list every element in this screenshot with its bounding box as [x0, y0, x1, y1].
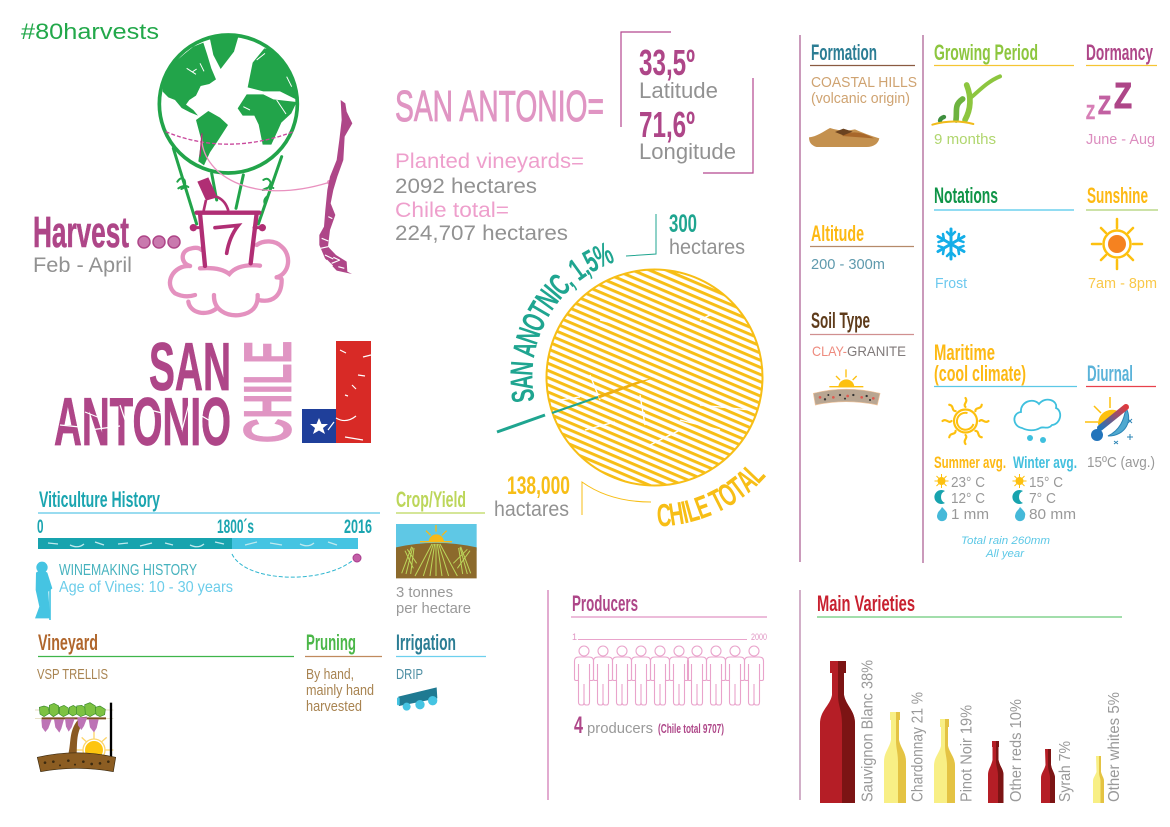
curved label: Chile total: E [690, 488, 715, 526]
heading: growing period: Growing Period [934, 40, 1038, 65]
winemaking history text: WINEMAKING HISTORY [59, 562, 197, 579]
138,000 hectares callout [494, 472, 651, 521]
soil value: GRANITE [847, 343, 906, 359]
bottle: Other whites [1093, 756, 1104, 803]
harvest heading [33, 208, 132, 277]
column dividers [548, 35, 923, 800]
panel: crop yield [396, 487, 485, 617]
curved label: San Anotnic: A [503, 375, 540, 390]
hashtag title: #80harvests [21, 19, 159, 44]
formation type: (volcanic origin) [811, 91, 910, 107]
timeline labels: 1800´s [217, 517, 254, 538]
planted vineyards figures [395, 150, 584, 245]
panel: notations [934, 183, 1074, 292]
icon: small sun [934, 474, 948, 488]
crop yield value: 3 tonnes [396, 584, 453, 601]
300 hectares callout [626, 210, 745, 259]
San Antonio wordmark [54, 329, 231, 460]
producers count: 4 [574, 712, 583, 739]
panel: irrigation [396, 630, 486, 711]
coordinates bracket [621, 32, 753, 173]
summer averages [934, 453, 1006, 523]
panel: maritime climate [934, 340, 1077, 560]
total rain note [961, 535, 1050, 560]
harvest heading: Harvest [33, 208, 129, 257]
timeline bar [38, 538, 358, 549]
pictogram scale: 1 [572, 632, 577, 642]
label: Chardonnay: Chardonnay 21 % [910, 692, 926, 802]
trellis type: VSP TRELLIS [37, 666, 108, 683]
Chilean flag [302, 341, 371, 443]
bottle: Syrah [1041, 749, 1055, 803]
138,000 hectares callout: 138,000 [507, 472, 570, 500]
Chile vertical label: CHILE [230, 341, 306, 443]
timeline labels: 0 [37, 517, 44, 538]
timeline curve and marker [232, 554, 361, 577]
icon: vineyard rows at sunrise [396, 524, 477, 578]
panel: formation [809, 40, 917, 147]
total rain note: Total rain 260mm [961, 535, 1050, 547]
winter averages [1012, 453, 1077, 523]
icon: sun [1092, 219, 1142, 269]
bucket numbered 7 [190, 213, 266, 266]
San Antonio equals heading: SAN ANTONIO= [395, 82, 604, 131]
bottle: Chardonnay [884, 712, 906, 803]
curved label: Chile total: H [666, 495, 686, 533]
growing period value: 9 months [934, 131, 996, 148]
latitude: Latitude [639, 78, 718, 103]
icon: elderly woman [35, 562, 52, 620]
label: Sauvignon Blanc: Sauvignon Blanc 38% [860, 660, 876, 802]
panel: soil type [810, 308, 914, 405]
route lines from globe to Chile [166, 132, 332, 191]
San Antonio wordmark: ANTONIO [54, 384, 231, 460]
irrigation method: DRIP [396, 666, 423, 683]
curved label: San Anotnic: , [572, 248, 596, 282]
curved label: Chile total: O [711, 475, 744, 514]
map of Chile [319, 100, 352, 274]
panel: main varieties [817, 591, 1123, 803]
summer averages: Summer avg. [934, 453, 1006, 472]
curved label: San Anotnic [503, 235, 618, 405]
planted vineyards figures: 2092 hectares [395, 175, 537, 198]
formation type: COASTAL HILLS [811, 75, 917, 91]
icon: sleeping letters [1086, 75, 1132, 124]
hatched circle [546, 270, 762, 486]
138,000 hectares callout: hactares [494, 498, 569, 521]
soil value: CLAY- [812, 343, 847, 359]
producers count [574, 712, 724, 739]
icon: winter cloud [1014, 400, 1060, 443]
producers count: producers [587, 720, 653, 737]
heading: viticulture history: Viticulture History [39, 487, 160, 512]
curved label: Chile total: T [704, 482, 731, 520]
icon: small sun [1012, 474, 1026, 488]
panel: sunshine [1086, 183, 1158, 292]
heading: irrigation: Irrigation [396, 630, 456, 655]
crop yield value [396, 584, 471, 617]
altitude value: 200 - 300m [811, 256, 885, 273]
heading: maritime cool climate [934, 340, 1026, 386]
panel: altitude [810, 221, 914, 273]
winter averages: 80 mm [1029, 506, 1076, 523]
curved label: San Anotnic: A [506, 338, 544, 360]
icon: small moon [1012, 490, 1023, 504]
icon: small moon [934, 490, 945, 504]
panel: viticulture history [35, 487, 380, 620]
planted vineyards figures: Chile total= [395, 199, 509, 222]
icon: sleeping letters: Z [1086, 102, 1095, 124]
wine bottle [197, 177, 228, 211]
icon: sprouts [932, 76, 1000, 125]
curved label: San Anotnic: S [504, 387, 542, 405]
heading: maritime cool climate: (cool climate) [934, 361, 1026, 386]
timeline labels: 2016 [344, 517, 372, 538]
longitude: 71,6º [639, 104, 695, 145]
timeline labels [37, 517, 372, 538]
panel: producers [571, 591, 767, 739]
icon: snowflake [938, 229, 964, 259]
diurnal value: 15ºC (avg.) [1087, 454, 1155, 471]
heading: crop yield: Crop/Yield [396, 487, 466, 512]
chart: share of Chile total [494, 210, 772, 534]
label: Pinot Noir: Pinot Noir 19% [958, 705, 976, 802]
curved label: Chile total [656, 456, 772, 534]
curved label: Chile total: A [729, 463, 764, 499]
latitude [639, 42, 718, 103]
curved label: San Anotnic: N [509, 323, 548, 348]
planted vineyards figures: Planted vineyards= [395, 150, 584, 173]
300 hectares callout: 300 [669, 210, 697, 238]
curved label: Chile total: I [678, 494, 691, 531]
curved label: Chile total: L [681, 491, 703, 529]
panel: diurnal [1085, 361, 1156, 471]
heading: producers: Producers [572, 591, 638, 616]
crop yield value: per hectare [396, 600, 471, 617]
curved label: San Anotnic: N [528, 283, 566, 316]
latitude: 33,5º [639, 42, 695, 83]
San Antonio wordmark: SAN [149, 329, 231, 405]
300 hectares callout: hectares [669, 236, 745, 259]
heading: maritime cool climate: Maritime [934, 340, 995, 365]
bottle: Sauvignon Blanc [820, 661, 855, 803]
pictogram scale: 2000 [751, 632, 767, 642]
bottle: Pinot Noir [934, 719, 955, 803]
curved label: Chile total: L [737, 456, 772, 490]
heading: diurnal: Diurnal [1087, 361, 1133, 386]
heading: altitude: Altitude [811, 221, 864, 246]
curved label: San Anotnic: O [514, 308, 553, 337]
producers count: (Chile total 9707) [658, 721, 724, 736]
planted vineyards figures: 224,707 hectares [395, 222, 568, 245]
pruning method: mainly hand [306, 682, 374, 699]
pruning method: By hand, [306, 666, 354, 683]
summer averages: 12° C [951, 490, 985, 507]
notation value: Frost [935, 275, 968, 292]
icon: drip pipe [397, 687, 437, 711]
winter averages: 15° C [1029, 474, 1063, 491]
bottle: Other reds [988, 741, 1004, 803]
globe [159, 33, 302, 173]
balloon ropes [173, 148, 282, 224]
vine age text: Age of Vines: 10 - 30 years [59, 579, 233, 596]
harvest months: Feb - April [33, 254, 132, 277]
curved label: San Anotnic: I [537, 278, 569, 306]
pictogram scale [572, 632, 767, 642]
dormancy value: June - Aug [1086, 131, 1155, 148]
pink cloud [170, 241, 288, 315]
icon: small drop [937, 507, 947, 521]
soil value [812, 343, 906, 359]
curved label: San Anotnic: C [542, 267, 577, 302]
pruning method: harvested [306, 698, 362, 715]
curved label: San Anotnic: % [588, 235, 618, 275]
summer averages: 1 mm [951, 506, 989, 523]
curved label: San Anotnic: T [521, 296, 559, 325]
heading: soil type: Soil Type [811, 308, 870, 333]
winter averages: Winter avg. [1013, 453, 1077, 472]
winter averages: 7° C [1029, 490, 1056, 507]
icon: hills [809, 128, 879, 147]
label: Syrah: Syrah 7% [1057, 741, 1074, 802]
longitude: Longitude [639, 139, 736, 164]
curved label: San Anotnic: 1 [562, 252, 592, 288]
pruning method [306, 666, 374, 715]
sunshine value: 7am - 8pm [1088, 275, 1157, 292]
curved label: Chile total: T [722, 470, 753, 506]
panel: pruning [305, 630, 382, 715]
icon: sleeping letters: Z [1114, 75, 1132, 116]
curved label: San Anotnic: N [504, 360, 540, 377]
heading: vineyard: Vineyard [38, 630, 98, 655]
curved label: San Anotnic: 5 [577, 243, 604, 280]
icon: trellised vine [35, 703, 116, 772]
pictogram: ten people [574, 646, 764, 705]
curved label: Chile total: C [656, 497, 672, 534]
curved label: San Anotnic: , [552, 263, 580, 293]
formation type [811, 75, 917, 107]
heading: pruning: Pruning [306, 630, 356, 655]
hot air balloon globe illustration [159, 33, 352, 274]
harvest dots [138, 236, 180, 248]
icon: small drop [1015, 507, 1025, 521]
longitude [639, 104, 736, 164]
panel: dormancy [1086, 40, 1157, 148]
San Antonio slice line [497, 378, 655, 432]
icon: soil with sun [813, 369, 880, 405]
panel: location [395, 32, 753, 245]
heading: main varieties: Main Varieties [817, 591, 915, 616]
panel: growing period [932, 40, 1074, 148]
label: Other whites: Other whites 5% [1106, 692, 1123, 802]
icon: thermometer with sun and moon [1085, 397, 1133, 444]
icon: sleeping letters: Z [1098, 90, 1111, 120]
panel: vineyard [35, 630, 294, 772]
label: Other reds: Other reds 10% [1008, 699, 1025, 802]
total rain note: All year [985, 548, 1025, 560]
icon: summer sun [942, 398, 988, 444]
heading: notations: Notations [934, 183, 998, 208]
heading: formation: Formation [811, 40, 877, 65]
summer averages: 23° C [951, 474, 985, 491]
